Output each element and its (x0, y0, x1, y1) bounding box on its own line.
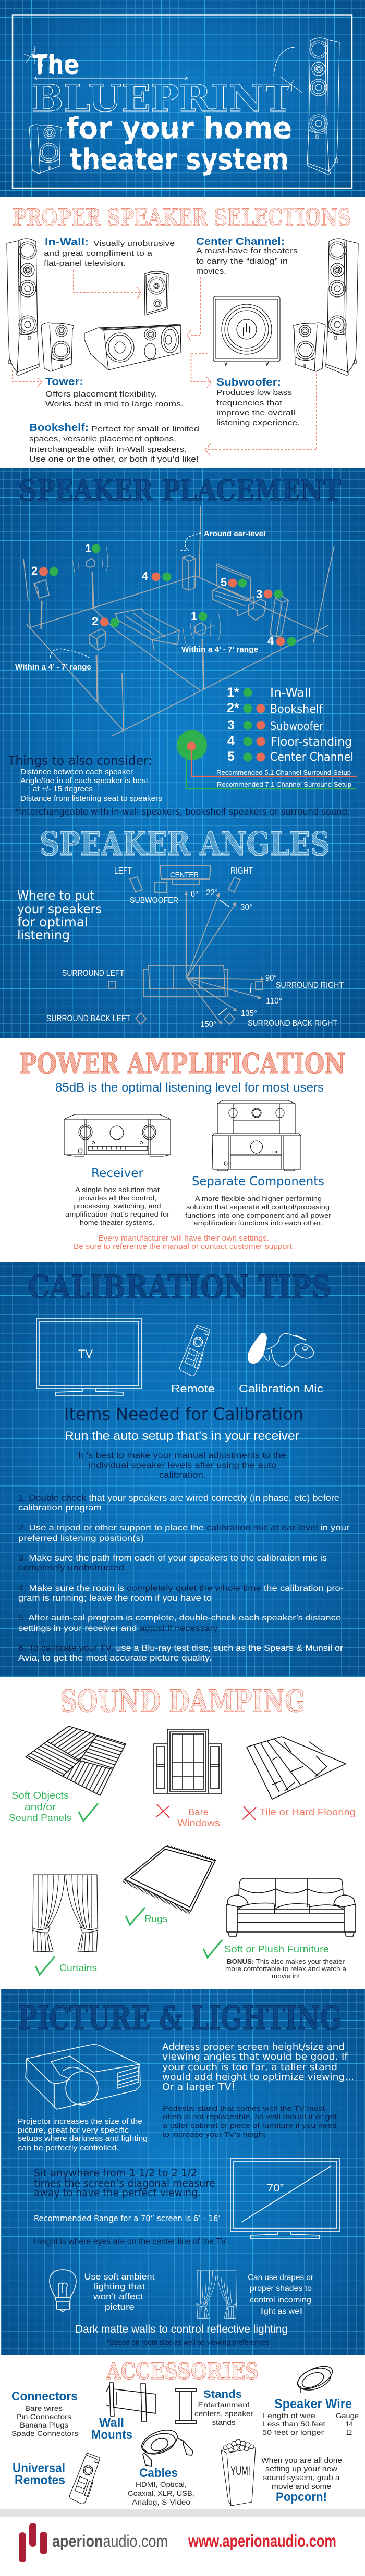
speaker angle diagram: SURROUND RIGHT (276, 980, 344, 990)
footer band (0, 2509, 365, 2517)
separate components description: functions into one component and all power (185, 1211, 332, 1219)
separate components description: A more flexible and higher performing (195, 1195, 322, 1203)
icon: sofa (227, 1878, 356, 1936)
surround setup key: Recommended 5.1 Channel Surround Setup (216, 769, 351, 776)
icon: universal remote (69, 2453, 100, 2504)
panel: speaker placement and angles (0, 468, 365, 1038)
calibration steps: 3. Make sure the path from each of your speakers to the calibration mic is (18, 1554, 327, 1563)
label: bare windows: Windows (177, 1818, 220, 1828)
where to put text: your speakers (17, 901, 102, 917)
calibration steps (18, 1494, 350, 1663)
calibration steps: 2. Use a tripod or other support to place the calibration mic at ear level in your (18, 1524, 350, 1532)
speaker angle diagram: SURROUND BACK LEFT (46, 1013, 130, 1023)
things to also consider (7, 753, 162, 803)
text: drapes: light as well (260, 2307, 303, 2316)
bonus note: more comfortable to relax and watch a (225, 1965, 347, 1973)
text: projector: Projector increases the size of the (18, 2117, 142, 2126)
callout arrow: tower (13, 370, 42, 387)
icon: curtains (32, 1875, 98, 1952)
manual adjustment note: calibration. (159, 1471, 206, 1480)
panel: sound damping (9, 1683, 356, 1980)
text: stands (194, 2388, 253, 2426)
manufacturer note: Be sure to reference the manual or contact customer support. (74, 1242, 294, 1251)
speaker number markers: 1 (191, 610, 197, 623)
label: bare windows: Bare (188, 1807, 209, 1817)
text: popcorn note: sound system, grab a (263, 2474, 340, 2482)
sofa in room (115, 609, 179, 651)
text: eye height: Height is where eyes are on the center line of the TV (34, 2237, 226, 2246)
text: connectors: Bare wires (25, 2404, 63, 2412)
speaker number markers: 5 (221, 576, 227, 589)
text: popcorn note (261, 2457, 342, 2504)
speaker number markers: 3 (256, 588, 262, 601)
text: projector: picture, great for very specific (18, 2126, 129, 2135)
callout: range left (15, 649, 91, 672)
text: stands: Stands (203, 2388, 242, 2400)
label: rugs (126, 1908, 167, 1925)
text: viewing distance: Sit anywhere from 1 1/2 to 2 1/2 (34, 2166, 197, 2179)
legend: 4 (227, 734, 235, 748)
label: curtains: Curtains (59, 1963, 97, 1973)
text: viewing distance (34, 2166, 215, 2199)
speaker number markers: 4 (142, 569, 149, 583)
angle arrows (184, 891, 264, 1025)
text: center channel (196, 236, 298, 276)
text: address screen height: would add height to optimize viewing... (162, 2072, 354, 2083)
text: pedestal stand: to increase your TV’s height (163, 2130, 265, 2138)
speaker number markers: 4 (267, 634, 274, 647)
text: tower: Tower: (45, 376, 83, 388)
things to also consider: at +/- 15 degrees (33, 785, 93, 794)
icon: rug (124, 1846, 216, 1913)
manufacturer note (74, 1234, 294, 1251)
icon: light bulb (50, 2270, 76, 2312)
label: soft objects: and/or (25, 1802, 56, 1812)
panel: proper speaker selections (7, 204, 358, 464)
footer logo (19, 2523, 168, 2562)
calibration steps: 5. After auto-cal program is complete, double-check each speaker’s distance (18, 1614, 341, 1623)
text: bookshelf: spaces, versatile placement options. (29, 435, 176, 443)
text: subwoofer: listening experience. (216, 418, 300, 427)
icon: calibration mic (248, 1333, 315, 1366)
text: bookshelf: Perfect for small or limited (91, 425, 199, 434)
where to put text: Where to put (17, 888, 94, 903)
legend: 3 (227, 718, 235, 733)
text: projector: can be perfectly controlled. (18, 2144, 119, 2152)
label: bare windows (156, 1804, 220, 1828)
title: theater system: theater system (70, 143, 289, 177)
legend (227, 685, 354, 764)
label: furniture: Soft or Plush Furniture (224, 1944, 329, 1954)
text: popcorn note: setting up your new (265, 2465, 338, 2473)
text: center channel: to carry the “dialog” in (196, 257, 288, 266)
text: projector (18, 2117, 148, 2152)
speaker number markers (31, 542, 296, 647)
panel: picture and lighting (1, 1989, 365, 2355)
text: speaker wire table: Length of wire (263, 2411, 315, 2420)
speaker angle diagram: CENTER (170, 871, 199, 880)
speaker angle diagram: RIGHT (230, 865, 253, 876)
receiver description (65, 1186, 170, 1227)
text: subwoofer (216, 377, 300, 427)
icon: hard flooring (247, 1737, 346, 1799)
text: stands: centers, speaker (194, 2409, 253, 2418)
text: ambient lighting: won’t affect (93, 2292, 143, 2301)
manual adjustment note: individual speaker levels after using the auto (89, 1461, 276, 1470)
speaker angle diagram: 135° (241, 1009, 257, 1018)
speaker angle diagram: 22° (206, 888, 218, 897)
tv and stand (213, 564, 253, 616)
calibration steps: 6. To calibrate your TV, use a Blu-ray test disc, such as the Spears & Munsil or (18, 1644, 344, 1653)
calibration steps: calibration program (18, 1504, 102, 1513)
text: drapes: control incoming (250, 2296, 311, 2305)
icon: crosshair marks (23, 46, 302, 93)
text: popcorn note: When you are all done (261, 2457, 342, 2465)
label: soft objects: Sound Panels (9, 1813, 71, 1823)
calibration steps: completely unobstructed (18, 1564, 124, 1572)
where to put text (17, 888, 102, 943)
text: pedestal stand: often is not replaceable, so wall mount it or get (163, 2112, 337, 2121)
label: curtains (35, 1956, 97, 1975)
label: soft objects: Soft Objects (11, 1790, 69, 1801)
receiver description: provides all the control, (78, 1194, 156, 1202)
icon: 70 inch tv: 70” (267, 2183, 284, 2194)
legend: In-Wall (270, 687, 311, 700)
legend: 1* (227, 685, 239, 700)
speaker angle diagram: 90° (265, 974, 277, 983)
text: ambient lighting: Use soft ambient (84, 2272, 155, 2282)
speakers in room (34, 555, 288, 650)
manufacturer note: Every manufacturer will have their own settings. (98, 1234, 269, 1243)
legend: Floor-standing (271, 736, 352, 749)
icon: separate components (212, 1100, 301, 1171)
text: in-wall: Visually unobtrusive (93, 239, 175, 248)
text: pedestal stand (163, 2104, 337, 2138)
icon: sound panels (26, 1726, 126, 1795)
speaker angle diagram: LEFT (114, 865, 132, 876)
text: address screen height: viewing angles that would be good. If (162, 2051, 348, 2062)
text: ambient lighting (84, 2272, 155, 2312)
couch (143, 965, 228, 997)
surround setup key: Recommended 7.1 Channel Surround Setup (217, 781, 351, 788)
text: universal remotes: Universal (13, 2461, 65, 2475)
text: address screen height: your couch is too far, a taller stand (162, 2062, 337, 2073)
text: projector: setups where darkness and lighting (18, 2134, 148, 2143)
legend: 5 (227, 749, 235, 764)
icon: remote (179, 1326, 210, 1376)
text: drapes: proper shades to (250, 2284, 312, 2293)
speaker angle diagram: SURROUND BACK RIGHT (248, 1018, 337, 1028)
label: rugs: Rugs (144, 1914, 167, 1924)
icon: in-wall speaker (144, 271, 168, 315)
things to also consider: Things to also consider: (7, 753, 152, 768)
icon: cable (139, 2425, 193, 2466)
text: connectors: Banana Plugs (20, 2421, 68, 2429)
text: wall mounts: Mounts (91, 2428, 132, 2442)
icon: receiver (64, 1114, 171, 1156)
tv label: TV (78, 1347, 93, 1360)
panel: power amplification (20, 1048, 345, 1251)
separate components label: Separate Components (192, 1174, 324, 1188)
text: wall mounts: Wall (99, 2416, 124, 2430)
text: connectors: Spade Connectors (11, 2429, 78, 2437)
text: footnote: *Based on room size as well as viewing preferences (107, 2338, 270, 2346)
title: Blueprint: BLUEPRINT (31, 77, 292, 120)
text: address screen height: Address proper screen height/size and (162, 2041, 345, 2052)
speaker angle diagram: SUBWOOFER (130, 896, 178, 905)
speaker angle diagram: SURROUND LEFT (62, 968, 124, 978)
text: connectors: Connectors (11, 2389, 78, 2404)
remote label: Remote (171, 1383, 215, 1395)
text: cables: Analog, S-Video (132, 2498, 190, 2506)
text: in-wall (44, 237, 175, 268)
text: center channel: movies. (196, 267, 226, 276)
calibration steps: preferred listening position(s) (18, 1534, 144, 1543)
speaker angle diagram (46, 865, 344, 1029)
text: speaker wire table: Less than 50 feet (263, 2420, 325, 2428)
text: address screen height: Or a larger TV! (162, 2082, 235, 2092)
header panel (0, 0, 365, 197)
speaker number markers: 2 (31, 564, 38, 577)
calibration steps: Avia, to get the most accurate picture quality. (18, 1654, 212, 1663)
icon: popcorn (221, 2439, 256, 2506)
icon: subwoofer (213, 296, 280, 366)
text: dark matte walls: Dark matte walls to control reflective lighting (75, 2323, 288, 2335)
text: universal remotes (13, 2461, 65, 2487)
bonus note (225, 1958, 347, 1980)
callout: range right: Within a 4’ - 7’ range (181, 645, 258, 654)
text: subwoofer: frequencies that (216, 399, 283, 407)
separate components description: amplification functions into each other. (194, 1219, 322, 1227)
speaker angle diagram: 150° (200, 1020, 216, 1029)
text: bookshelf: Use one or the other, or both if you’d like! (29, 455, 199, 464)
text: center channel: Center Channel: (196, 236, 285, 247)
bonus note: BONUS: This also makes your theater (227, 1958, 345, 1965)
text: center channel: A must-have for theaters (196, 246, 298, 255)
receiver description: processing, switching, and (74, 1202, 161, 1210)
speaker number markers: 2 (92, 615, 98, 628)
surround setup key (177, 730, 357, 789)
label: soft objects (9, 1790, 98, 1823)
receiver description: amplification that’s required for (65, 1210, 170, 1218)
text: tower: Works best in mid to large rooms. (45, 400, 184, 408)
text: in-wall: flat-panel television. (44, 259, 126, 268)
speaker angle diagram: 30° (240, 903, 252, 912)
legend: Subwoofer (270, 720, 324, 733)
text: stands: Entertainment (198, 2400, 250, 2409)
sound wave arcs (72, 547, 221, 646)
text: subwoofer: Subwoofer: (216, 377, 281, 388)
icon: stand (176, 2388, 196, 2424)
text: tower (45, 376, 184, 408)
icon: right bookshelf (293, 323, 325, 371)
receiver description: A single box solution that (75, 1186, 160, 1194)
text: cables: HDMI, Optical, (136, 2480, 187, 2488)
manual adjustment note: It ‘s best to make your manual adjustments to the (78, 1451, 286, 1460)
icon: popcorn: YUM! (230, 2464, 250, 2478)
bonus note: movie in! (272, 1972, 300, 1980)
icon: drapes (197, 2271, 237, 2319)
text: cables (128, 2466, 194, 2506)
text: in-wall: and great compliment to a (44, 249, 153, 258)
text: ambient lighting: lighting that (94, 2282, 145, 2292)
callout: around ear-level (180, 529, 265, 551)
icon: window (154, 1729, 222, 1793)
text: recommended range: Recommended Range for a 70” screen is 6’ - 16’ (34, 2213, 221, 2223)
label: tile or hard flooring: Tile or Hard Flooring (260, 1807, 356, 1817)
icon: wire coil (294, 2361, 336, 2394)
label: furniture (203, 1940, 329, 1958)
icon: left tower (7, 239, 39, 375)
text: address screen height (162, 2041, 354, 2092)
text: bookshelf: Interchangeable with In-Wall speakers. (29, 445, 187, 454)
where to put text: for optimal (17, 914, 88, 930)
text: connectors (11, 2389, 78, 2437)
speaker angle diagram: 0° (191, 890, 198, 899)
where to put text: listening (17, 927, 70, 943)
heading: SOUND DAMPING (60, 1683, 305, 1719)
label: tile or hard flooring (242, 1806, 356, 1820)
icon: 70 inch tv (230, 2159, 339, 2239)
legend: Center Channel (270, 751, 354, 764)
text: popcorn note: Popcorn! (276, 2490, 327, 2504)
title: for your home: for your home (66, 112, 292, 145)
receiver label: Receiver (91, 1167, 144, 1180)
icon: wall mount (106, 2383, 156, 2422)
text: cables: Cables (139, 2466, 178, 2480)
auto setup subheading: Run the auto setup that’s in your receiver (65, 1429, 299, 1442)
callout arrow: bookshelf (205, 374, 317, 455)
icon: tv (36, 1318, 141, 1395)
room diagram (23, 506, 334, 736)
separate components description: solution that seperate all control/procesing (186, 1203, 330, 1211)
text: universal remotes: Remotes (15, 2473, 65, 2487)
separate components description (185, 1195, 332, 1227)
calibration steps: settings in your receiver and adjust if necessary (18, 1624, 218, 1633)
footer logo: aperionaudio.com (52, 2532, 168, 2550)
callout arrow: center channel (187, 277, 201, 341)
icon: left bookshelf (41, 323, 74, 371)
text: speaker wire table: Gauge (336, 2411, 359, 2420)
text: drapes (248, 2273, 313, 2316)
text: pedestal stand: Pedestal stand that comes with the TV most (163, 2104, 325, 2112)
text: tower: Offers placement flexibility. (45, 390, 157, 399)
speaker angle diagram: 110° (266, 997, 282, 1006)
text: bookshelf (29, 422, 199, 464)
text: viewing distance: away to have the perfect viewing. (34, 2186, 201, 2199)
icon: tower speaker (307, 38, 339, 174)
heading: ACCESSORIES (106, 2359, 259, 2385)
manual adjustment note (78, 1451, 286, 1480)
things to also consider: Distance from listening seat to speakers (20, 794, 162, 803)
things to also consider: Distance between each speaker (20, 767, 133, 776)
icon: bookshelf speaker (29, 125, 62, 174)
title: The: The (32, 49, 79, 81)
speaker number markers: 1 (85, 542, 91, 555)
mic label: Calibration Mic (239, 1383, 323, 1395)
text: drapes: Can use drapes or (248, 2273, 313, 2282)
legend: Bookshelf (270, 703, 323, 716)
text: subwoofer: improve the overall (216, 408, 295, 417)
text: viewing distance: times the screen’s diagonal measure (34, 2177, 215, 2189)
text: ambient lighting: picture (105, 2302, 135, 2312)
callout arrow: in-wall (74, 270, 141, 299)
text: cables: Coaxial, XLR, USB, (128, 2489, 194, 2497)
text: speaker wire table: 50 feet or longer (262, 2428, 324, 2436)
icon: right tower (326, 239, 358, 375)
text: wall mounts (91, 2416, 132, 2442)
items needed heading: Items Needed for Calibration (64, 1404, 303, 1424)
text: bookshelf: Bookshelf: (29, 422, 89, 434)
calibration steps: 1. Double check that your speakers are wired correctly (in phase, etc) before (18, 1494, 339, 1503)
dimension arrow (34, 77, 188, 80)
legend: 2* (227, 701, 239, 715)
text: speaker wire table (262, 2397, 359, 2436)
callout: range left: Within a 4’ - 7’ range (15, 663, 91, 672)
text: speaker wire table: 14 (346, 2420, 352, 2428)
receiver description: home theater systems. (80, 1219, 154, 1227)
text: stands: stands (212, 2418, 236, 2426)
text: pedestal stand: a taller cabinet or piece of furniture if you need (163, 2121, 337, 2129)
text: subwoofer: Produces low bass (216, 388, 292, 397)
things to also consider: Angle/toe in of each speaker is best (20, 776, 149, 785)
icon: center channel speaker (84, 324, 181, 370)
icon: projector (26, 2045, 140, 2109)
text: popcorn note: movie and some (272, 2483, 331, 2491)
subheading: 85dB is the optimal listening level for most users (55, 1081, 324, 1095)
calibration steps: gram is running; leave the room if you have to (18, 1594, 212, 1603)
callout arrow: subwoofer (191, 354, 211, 388)
callout: around ear-level: Around ear-level (204, 529, 265, 538)
text: connectors: Pin Connectors (16, 2412, 71, 2421)
text: in-wall: In-Wall: (45, 237, 89, 248)
text: speaker wire table: 12 (346, 2428, 352, 2436)
panel: calibration tips (0, 1262, 365, 1677)
panel: accessories (11, 2359, 359, 2506)
calibration steps: 4. Make sure the room is completely quiet the whole time the calibration pro- (18, 1584, 344, 1593)
text: speaker wire table: Speaker Wire (274, 2397, 352, 2411)
